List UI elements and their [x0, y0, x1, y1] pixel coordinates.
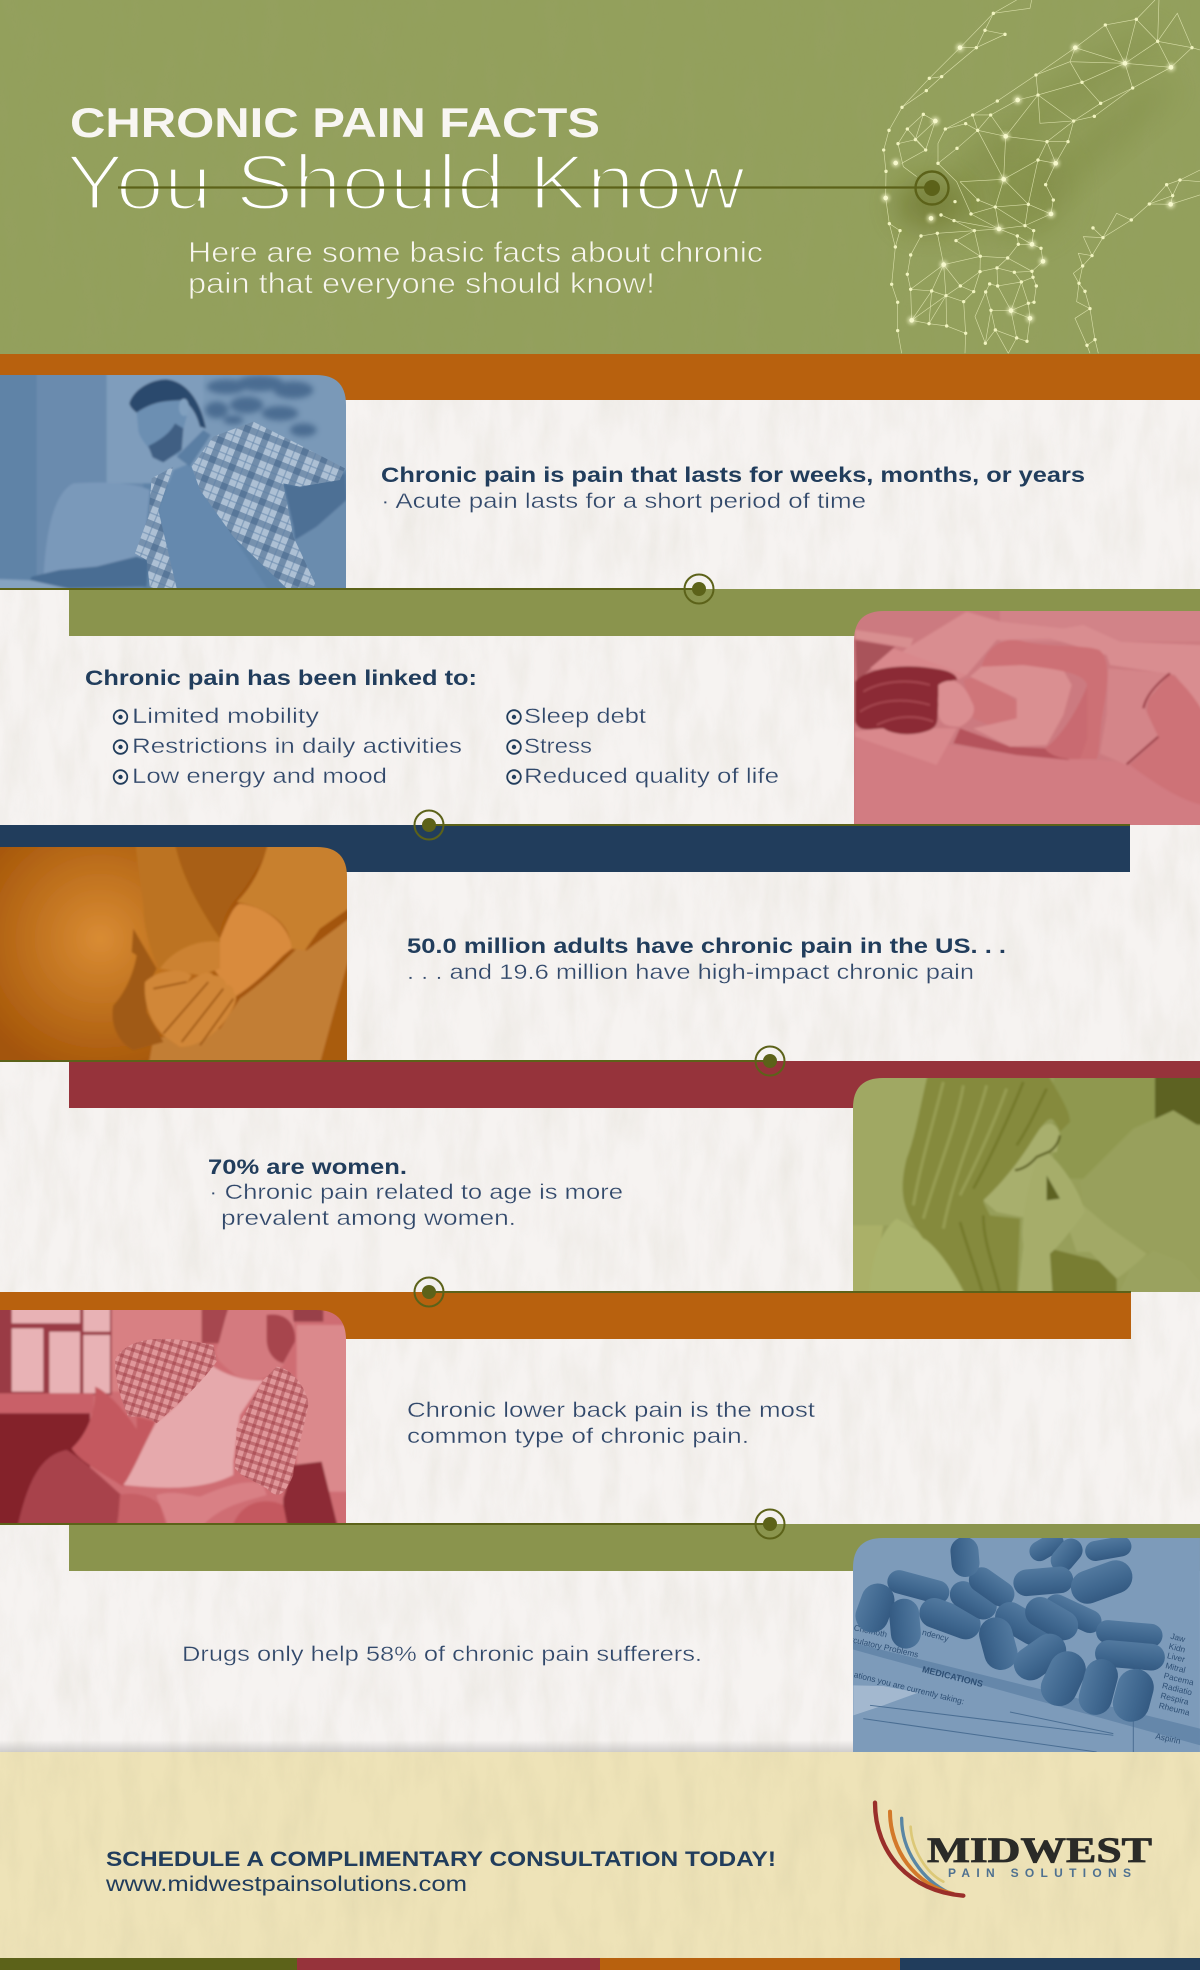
header panel background	[0, 0, 1200, 354]
footer panel background	[0, 1752, 1200, 1958]
photo: woman lying on bed (pink)	[854, 611, 1200, 825]
fact 6 text: Drugs only help 58% of chronic pain sufferers.	[182, 1643, 702, 1666]
photo: pills on medical form (blue): Radiatio	[1161, 1680, 1194, 1697]
photo: pills on medical form (blue): Mitral	[1164, 1660, 1187, 1675]
connector 2	[414, 810, 1130, 840]
photo: pills on medical form (blue): Chemoth	[853, 1622, 888, 1639]
photo: pills on medical form (blue): ations you are currently taking:	[853, 1669, 965, 1706]
fact 1 text: Chronic pain is pain that lasts for weeks, months, or years	[381, 463, 1085, 487]
bullet list column 2	[507, 705, 779, 788]
connector 5	[0, 1510, 784, 1538]
header intro text: pain that everyone should know!	[188, 268, 655, 300]
photo: pills on medical form (blue): Liver	[1166, 1650, 1186, 1664]
photo: pills on medical form (blue): Rheuma	[1158, 1700, 1191, 1718]
photo: person holding elbow (orange)	[0, 847, 347, 1060]
section shadow above footer	[0, 1740, 853, 1752]
fact 4 text: prevalent among women.	[221, 1207, 516, 1230]
fact 5 text	[407, 1399, 815, 1448]
colour bands	[0, 354, 1200, 1571]
fact 3 text: . . . and 19.6 million have high-impact chronic pain	[407, 961, 974, 984]
title line 1: CHRONIC PAIN FACTS	[70, 99, 600, 146]
photo: pills on medical form (blue): Jaw	[1169, 1631, 1187, 1644]
photo: pills on medical form (blue): Kidn	[1168, 1641, 1187, 1655]
fact 5 text: Chronic lower back pain is the most	[407, 1399, 815, 1422]
call to action: SCHEDULE A COMPLIMENTARY CONSULTATION TODAY!	[106, 1848, 776, 1871]
fact 4 text: 70% are women.	[208, 1155, 407, 1179]
fact 4 text	[208, 1155, 623, 1230]
photo: pills on medical form (blue): MEDICATIONS	[921, 1664, 984, 1689]
fact 2: linked conditions	[85, 666, 779, 788]
bullet list column 1: Low energy and mood	[132, 765, 387, 788]
photo: older man holding back (red)	[0, 1310, 346, 1523]
bullet list column 2: Stress	[524, 735, 592, 758]
bullet list column 1: Limited mobility	[132, 705, 320, 728]
fact 3 text: 50.0 million adults have chronic pain in the US. . .	[407, 934, 1006, 958]
call to action	[105, 1848, 776, 1896]
headline	[66, 99, 746, 226]
photo: woman pinching nose (olive)	[853, 1078, 1200, 1292]
bullet list column 1	[114, 705, 462, 788]
knee network graphic	[884, 0, 1200, 353]
photo: pills on medical form (blue): Pacema	[1163, 1670, 1195, 1687]
fact 1 text: · Acute pain lasts for a short period of time	[381, 490, 866, 513]
photo: man holding lower back (blue)	[0, 375, 346, 588]
connector 4	[414, 1278, 1131, 1306]
photo: pills on medical form (blue): rculatory Problems	[850, 1634, 919, 1660]
bottom colour bar	[0, 1958, 1200, 1970]
bullet list column 2: Reduced quality of life	[524, 765, 779, 788]
photo: pills on medical form (blue)	[850, 1529, 1200, 1757]
fact 1 text	[381, 463, 1085, 513]
header intro text: Here are some basic facts about chronic	[188, 237, 763, 269]
connector 1	[0, 574, 714, 604]
photo: pills on medical form (blue): Aspirin	[1155, 1731, 1182, 1746]
connector 3	[0, 1046, 784, 1076]
header pointer line and target	[118, 172, 948, 204]
logo: Midwest Pain Solutions	[875, 1803, 1152, 1896]
fact 3 text	[407, 934, 1006, 984]
call to action: www.midwestpainsolutions.com	[105, 1873, 467, 1896]
logo wordmark: MIDWEST	[927, 1830, 1152, 1870]
title line 2: You Should Know	[66, 138, 746, 226]
logo tagline: PAIN SOLUTIONS	[948, 1866, 1131, 1880]
fact 5 text: common type of chronic pain.	[407, 1425, 749, 1448]
photo: pills on medical form (blue): Respira	[1159, 1690, 1190, 1707]
logo swoosh	[875, 1803, 963, 1896]
fact 4 text: · Chronic pain related to age is more	[209, 1181, 623, 1204]
bullet list column 1: Restrictions in daily activities	[132, 735, 462, 758]
header intro text	[188, 237, 763, 300]
photo: pills on medical form (blue): ndency	[921, 1627, 950, 1644]
bullet list column 2: Sleep debt	[524, 705, 646, 728]
heading: Chronic pain has been linked to:	[85, 666, 477, 690]
